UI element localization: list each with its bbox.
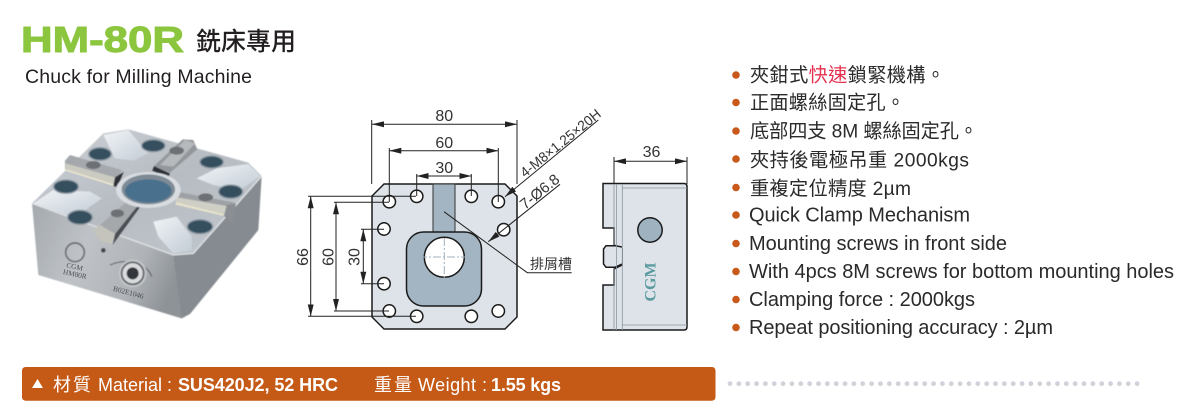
list items: Repeat positioning accuracy : 2µm [749, 317, 1053, 339]
weight [374, 375, 561, 395]
product photo: chuck [32, 129, 262, 318]
list items: 夾鉗式快速鎖緊機構。 [750, 64, 945, 86]
callout: chip slot: 排屑槽 [530, 256, 572, 272]
body [603, 184, 687, 330]
logo: CGM [642, 262, 660, 302]
spec bar [22, 367, 716, 401]
drawing: front view [295, 106, 604, 329]
vertical dimensions: 66 [295, 248, 312, 266]
horizontal dimensions: 60 [435, 135, 453, 152]
material [53, 375, 338, 395]
front face [32, 203, 193, 318]
nub [604, 246, 622, 267]
drawing: side view [603, 144, 687, 330]
plate [372, 184, 517, 329]
dotted rule [730, 381, 1140, 386]
list items: 底部四支 8M 螺絲固定孔。 [750, 120, 978, 142]
icon: triangle [32, 379, 43, 388]
horizontal dimensions: 80 [435, 108, 453, 125]
vertical dimensions: 30 [346, 248, 364, 266]
list items: 夾持後電極吊重 2000kgs [750, 150, 969, 172]
callout: thread: 4-M8×1.25×20H [517, 106, 604, 180]
list items: Quick Clamp Mechanism [749, 204, 970, 226]
bullets [732, 71, 740, 331]
feature list [732, 64, 1174, 339]
heading: chinese subtitle: 銑床專用 [196, 28, 296, 56]
chip slot [433, 184, 455, 232]
weight: Weight : [418, 375, 487, 395]
list items [749, 64, 1174, 339]
subtitle: english: Chuck for Milling Machine [25, 66, 252, 88]
callout: hole size: 7-Ø6.8 [517, 171, 563, 213]
engraved text: serial: B02E1046 [112, 284, 145, 301]
dimension: width [614, 144, 687, 184]
engraved text: model: CGM [66, 260, 84, 273]
vertical dimensions [295, 196, 416, 316]
list items: 重複定位精度 2µm [750, 178, 911, 200]
list items: 正面螺絲固定孔。 [750, 92, 905, 114]
callout: chip slot [444, 212, 572, 273]
weight: 重量 [374, 375, 412, 395]
callout: hole size [488, 171, 563, 242]
horizontal dimensions [372, 108, 517, 202]
material: 材質 [53, 375, 91, 395]
vertical dimensions: 60 [320, 248, 338, 266]
mounting holes [378, 190, 510, 322]
material: SUS420J2, 52 HRC [178, 375, 338, 395]
hole [638, 218, 662, 242]
horizontal dimensions: 30 [435, 160, 453, 177]
list items: Clamping force : 2000kgs [749, 289, 975, 311]
list items: Mounting screws in front side [749, 233, 1007, 255]
top face [32, 129, 262, 255]
material: Material : [98, 375, 172, 395]
list items: With 4pcs 8M screws for bottom mounting holes [749, 261, 1174, 283]
weight: 1.55 kgs [491, 375, 561, 395]
title: HM-80R: HM-80R [21, 19, 184, 60]
side face [173, 176, 262, 318]
engraved text: code: HM80R [62, 267, 88, 281]
center hole [424, 237, 464, 277]
pocket [406, 232, 482, 306]
dimension: width: 36 [643, 144, 660, 161]
